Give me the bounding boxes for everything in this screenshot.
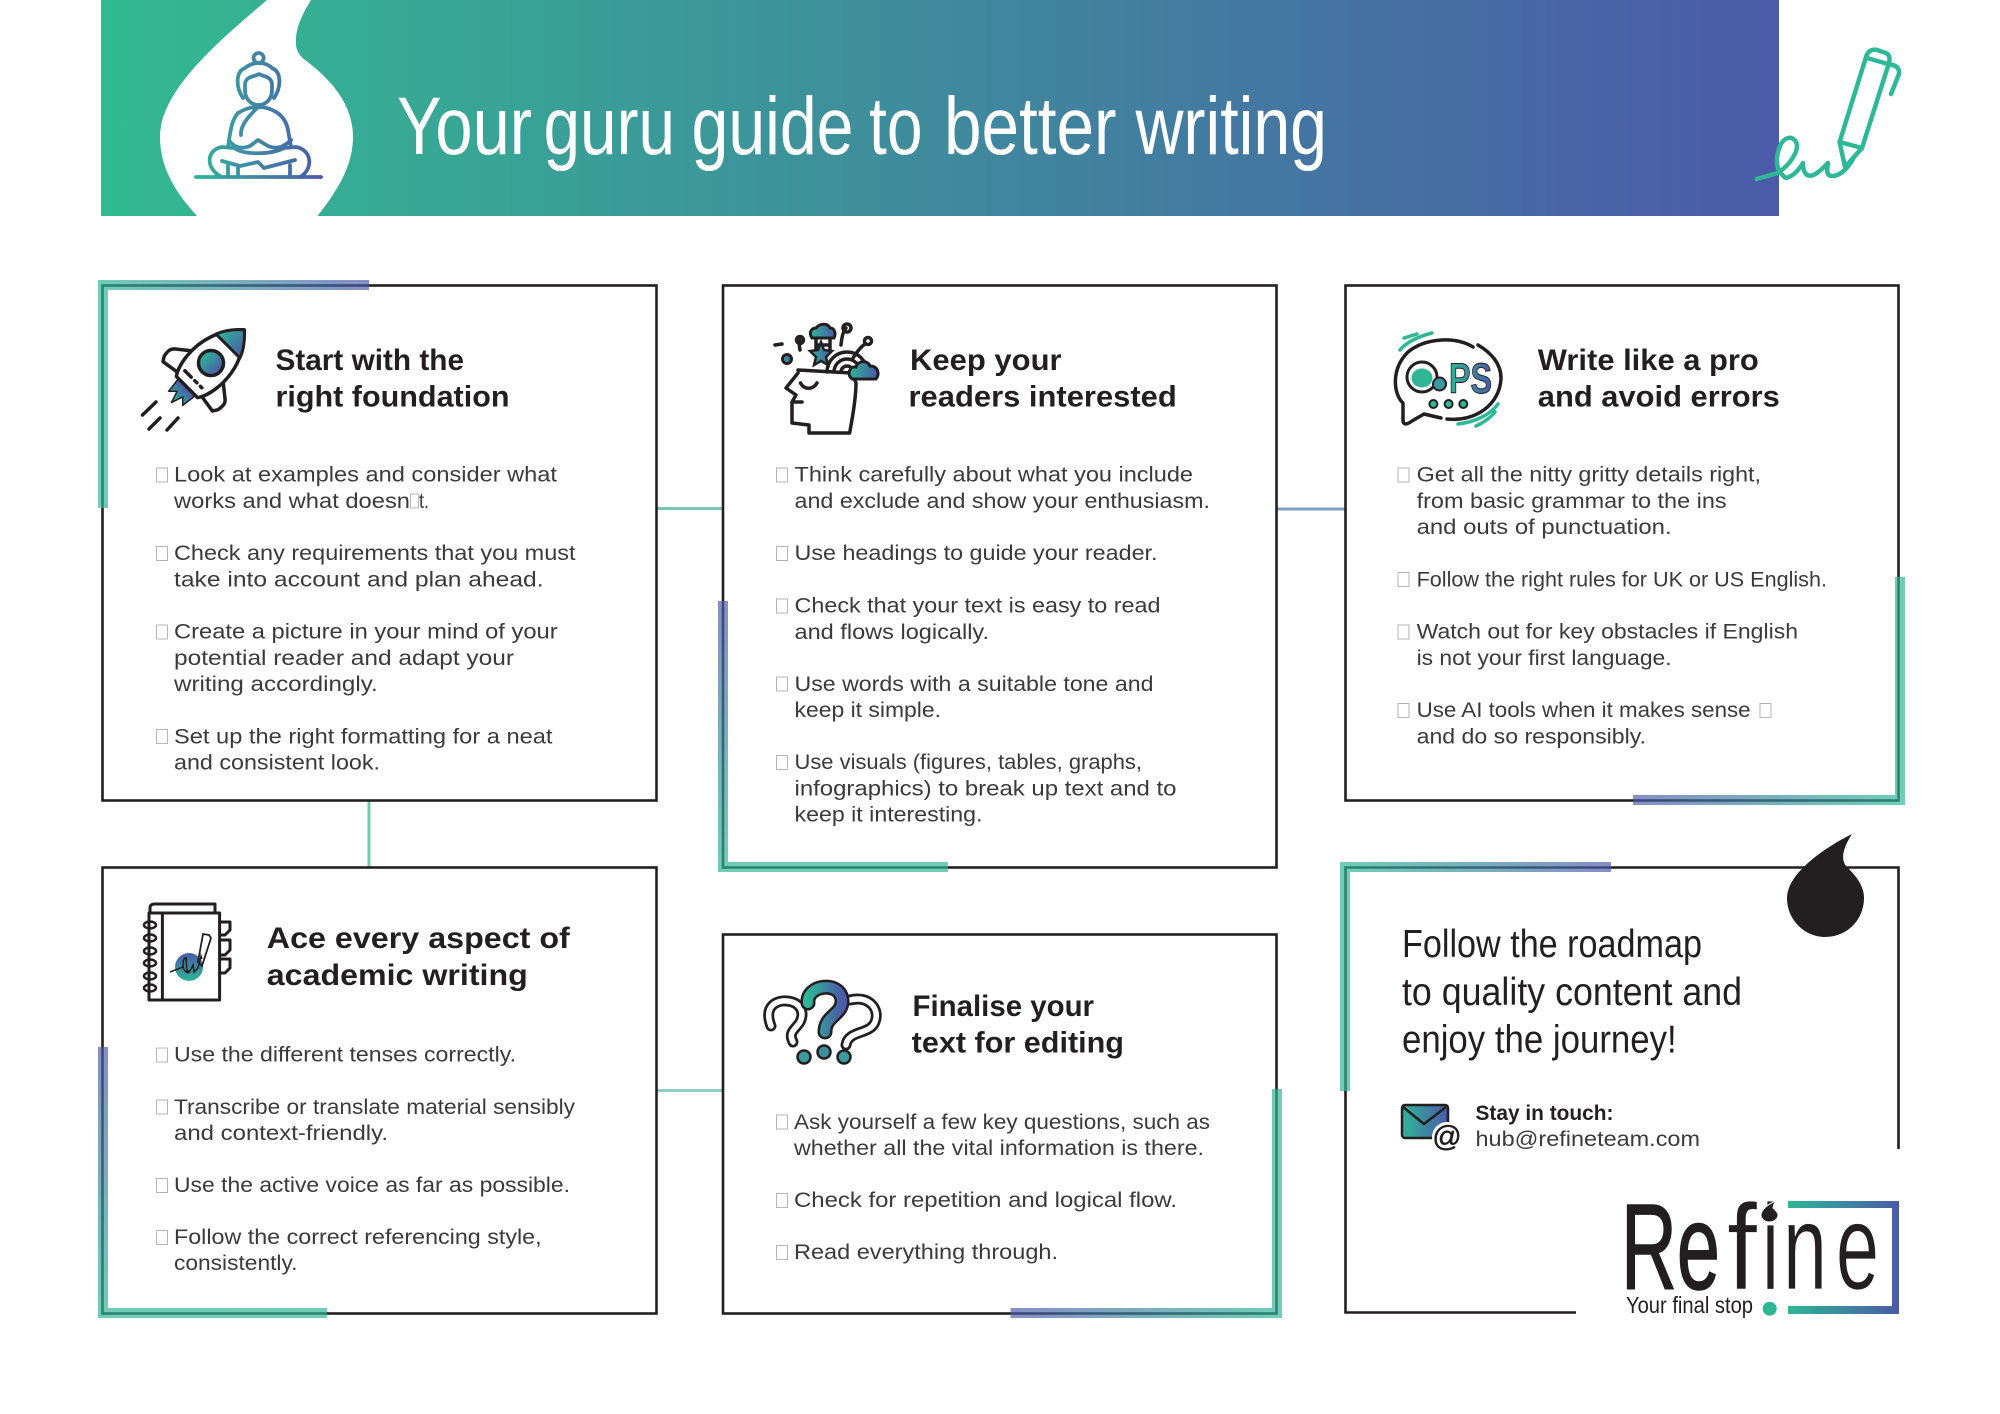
card border (102, 868, 656, 1314)
contact details: Stay in touch: (1476, 1102, 1614, 1125)
bullet list: whether all the vital information is there. (793, 1136, 1204, 1160)
icon: email envelope: @ (1432, 1121, 1462, 1153)
bullet list: Get all the nitty gritty details right, (1417, 463, 1761, 487)
logo drop (1761, 1201, 1778, 1222)
bullet list (776, 1110, 1210, 1264)
bullet list (156, 1043, 575, 1275)
panel: finalise your text for editing (723, 934, 1282, 1318)
icon: email envelope (1402, 1105, 1462, 1153)
heading (1538, 344, 1780, 414)
logo: Refine (1621, 1179, 1899, 1318)
closing message: to quality content and (1402, 971, 1742, 1014)
card border (102, 286, 656, 800)
closing message (1402, 923, 1742, 1062)
logo wordmark (1621, 1179, 1879, 1315)
card border (723, 934, 1276, 1314)
title: better (944, 81, 1116, 172)
heading (908, 344, 1177, 414)
logo wordmark: i (1762, 1179, 1779, 1315)
panel: keep your readers interested (718, 286, 1276, 872)
panel: write like a pro and avoid errors (1346, 286, 1905, 805)
bullet list (1398, 463, 1827, 748)
bullet list: Use AI tools when it makes sense (1417, 698, 1751, 722)
bullet list: Check for repetition and logical flow. (794, 1188, 1177, 1212)
accent bracket (1010, 1089, 1282, 1318)
logo wordmark: Re (1621, 1179, 1720, 1315)
icon: oops speech bubble (1395, 333, 1501, 426)
bullet list: Read everything through. (794, 1240, 1058, 1264)
heading: right foundation (276, 381, 510, 414)
bullet list: Check any requirements that you must (174, 541, 576, 565)
icon: meditating guru (196, 53, 321, 177)
bullet list: works and what doesn (173, 489, 410, 513)
logo wordmark: n (1783, 1179, 1827, 1315)
connector: card 2 to card 3 (1277, 508, 1345, 510)
title: to (869, 81, 922, 172)
icon: notebook (144, 904, 230, 1000)
heading (276, 344, 510, 414)
bullet list: infographics) to break up text and to (794, 776, 1177, 800)
heading: and avoid errors (1538, 381, 1780, 414)
heading: Finalise your (912, 990, 1094, 1023)
connector: card 1 to card 4 (368, 801, 370, 867)
title: guru (544, 81, 675, 172)
banner (101, 0, 1779, 216)
accent bracket (98, 280, 369, 508)
heading: text for editing (912, 1027, 1124, 1060)
bullet list: and consistent look. (174, 751, 380, 775)
heading: readers interested (908, 381, 1177, 414)
heading: Start with the (276, 344, 464, 377)
bullet list: and exclude and show your enthusiasm. (794, 489, 1210, 513)
bullet list: Think carefully about what you include (794, 463, 1193, 487)
icon: head with ideas (775, 324, 878, 433)
accent bracket (1633, 577, 1905, 805)
icon: pen with signature (1757, 50, 1899, 179)
bullet list: and flows logically. (794, 620, 989, 644)
heading: Ace every aspect of (267, 922, 571, 955)
bullet list: Use the different tenses correctly. (174, 1043, 516, 1067)
bullet list: and outs of punctuation. (1417, 515, 1672, 539)
bullet list: Use visuals (figures, tables, graphs, (794, 750, 1142, 774)
heading (912, 990, 1124, 1060)
bullet list: keep it simple. (794, 698, 941, 722)
bullet list (156, 463, 576, 775)
icon: rocket (142, 302, 272, 430)
bullet list: consistently. (174, 1251, 298, 1275)
icon: question marks (769, 987, 876, 1064)
accent bracket (98, 1047, 327, 1318)
bullet list: writing accordingly. (173, 672, 378, 696)
icon: oops speech bubble: PS (1449, 355, 1492, 403)
logo dot (1763, 1302, 1777, 1316)
bullet list: Follow the correct referencing style, (174, 1225, 542, 1249)
connector: card 4 to card 5 (657, 1089, 722, 1092)
heading: academic writing (267, 959, 528, 992)
title: writing (1135, 81, 1327, 172)
bullet list: and do so responsibly. (1417, 724, 1646, 748)
card outline with gap for logo (1346, 868, 1898, 1312)
bullet list: Use headings to guide your reader. (794, 541, 1158, 565)
panel: ace every aspect of academic writing (98, 868, 656, 1318)
banner white drop shape (160, 0, 353, 216)
closing message: Follow the roadmap (1402, 923, 1702, 966)
accent bracket (718, 601, 948, 872)
bullet list: Follow the right rules for UK or US English. (1417, 567, 1827, 591)
logo tagline: Your final stop (1626, 1292, 1753, 1318)
bullet list: is not your first language. (1417, 646, 1672, 670)
bullet list: t. (419, 489, 429, 513)
heading: Write like a pro (1538, 344, 1759, 377)
card border (1346, 286, 1898, 800)
logo wordmark: e (1836, 1179, 1879, 1315)
closing message: enjoy the journey! (1402, 1019, 1677, 1062)
bullet list: Set up the right formatting for a neat (174, 724, 553, 748)
title: guide (692, 81, 854, 172)
bullet list: Check that your text is easy to read (794, 594, 1160, 618)
contact details (1476, 1102, 1700, 1151)
bullet list: Look at examples and consider what (174, 463, 557, 487)
connector: card 1 to card 2 (657, 507, 722, 510)
heading (267, 922, 571, 992)
bullet list (776, 463, 1210, 827)
bullet list: Use the active voice as far as possible. (174, 1173, 570, 1197)
bullet list: potential reader and adapt your (174, 646, 514, 670)
title: Your (397, 81, 532, 172)
bullet list: Transcribe or translate material sensibly (174, 1095, 575, 1119)
logo wordmark: f (1727, 1179, 1758, 1315)
heading: Keep your (910, 344, 1062, 377)
bullet list: and context-friendly. (174, 1121, 388, 1145)
bullet list: Create a picture in your mind of your (174, 620, 558, 644)
banner gradient background (101, 0, 1779, 216)
logo bracket (1788, 1201, 1899, 1314)
bullet list: from basic grammar to the ins (1417, 489, 1727, 513)
contact details: hub@refineteam.com (1476, 1127, 1700, 1151)
panel: closing message and logo (1340, 834, 1899, 1318)
panel: start with the right foundation (98, 280, 656, 800)
bullet list: Use words with a suitable tone and (794, 672, 1154, 696)
bullet list: Ask yourself a few key questions, such as (794, 1110, 1210, 1134)
bullet list: Watch out for key obstacles if English (1417, 620, 1798, 644)
icon: black drop (1787, 834, 1864, 937)
card border (723, 286, 1276, 868)
bullet list: take into account and plan ahead. (174, 567, 544, 591)
accent bracket (1340, 862, 1611, 1091)
bullet list: keep it interesting. (794, 803, 982, 827)
title (397, 81, 1327, 172)
